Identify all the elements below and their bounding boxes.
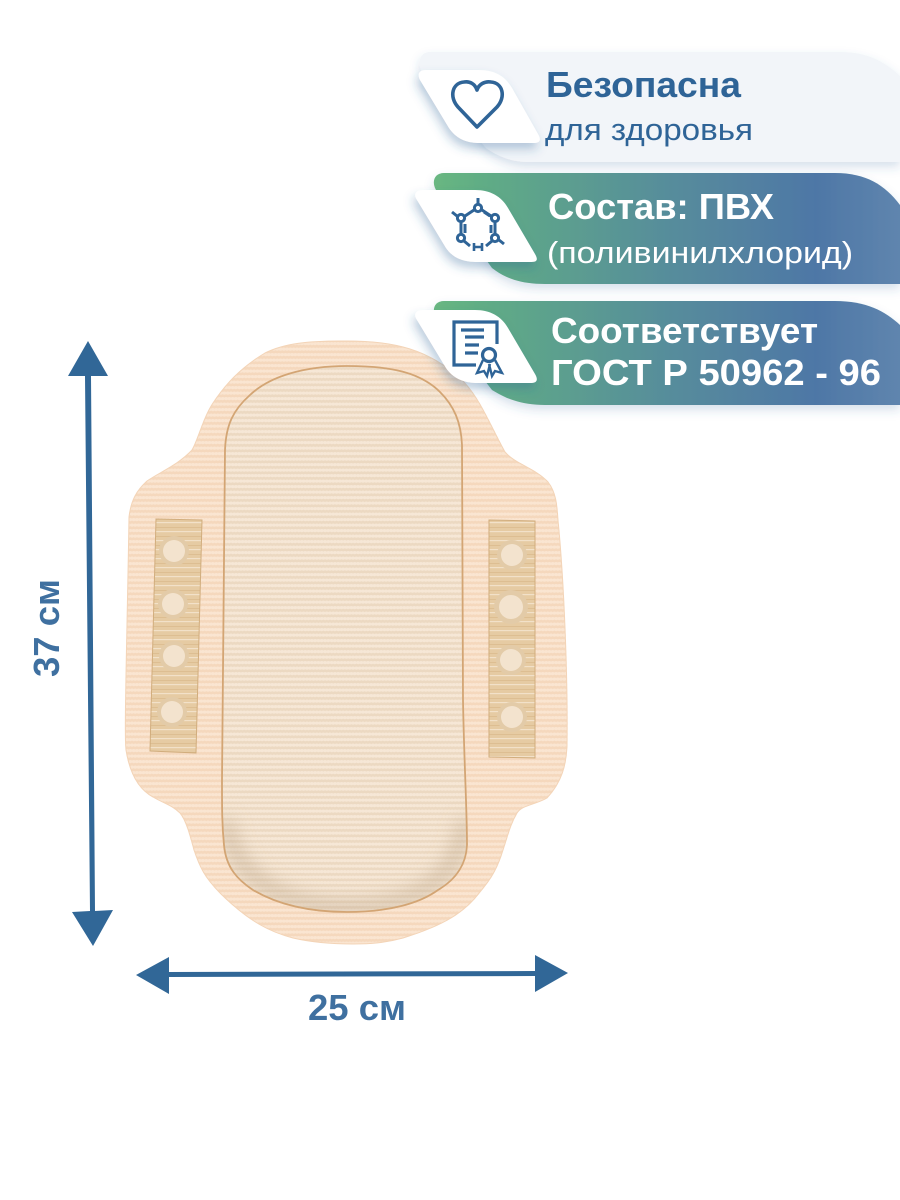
subheading: (поливинилхлорид) <box>547 235 853 270</box>
badge: GOST compliance <box>415 301 900 405</box>
band <box>434 173 900 284</box>
mat inner cushion <box>222 366 467 912</box>
band <box>420 52 900 162</box>
icon plate <box>415 310 537 383</box>
subheading: для здоровья <box>545 112 753 147</box>
icon: certificate <box>454 322 502 376</box>
left suction strip <box>150 519 202 753</box>
label: 37 см: 37 см <box>26 579 67 677</box>
badge: composition PVC <box>415 173 900 284</box>
label: 25 см: 25 см <box>308 987 406 1028</box>
band <box>434 301 900 405</box>
right suction strip <box>489 520 535 758</box>
arrow: width dimension <box>136 955 568 994</box>
badge: safe for health <box>419 52 900 162</box>
icon: molecule <box>452 198 504 251</box>
arrow: height dimension <box>68 341 113 946</box>
heading line two: ГОСТ Р 50962 - 96 <box>551 352 881 393</box>
heading line one: Соответствует <box>551 310 818 351</box>
icon plate <box>415 190 537 262</box>
heading: Состав: ПВХ <box>548 186 774 227</box>
product: bath mat <box>125 341 567 944</box>
mat outer body <box>125 341 567 944</box>
icon plate <box>419 70 540 143</box>
icon: heart <box>453 82 502 127</box>
heading: Безопасна <box>546 64 742 105</box>
